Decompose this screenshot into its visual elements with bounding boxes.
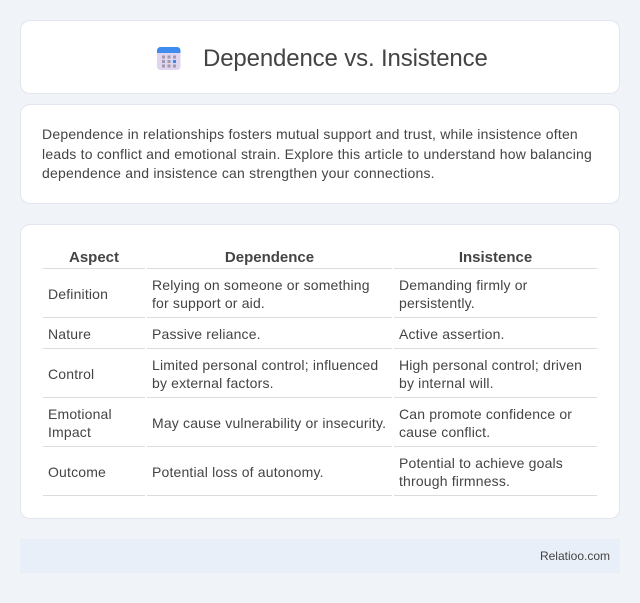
text block: introduction: leads to conflict and emotional strain. Explore this article to understand how balancing — [42, 146, 592, 162]
row: control: Limited personal control; influenced — [152, 357, 378, 373]
row: definition — [43, 277, 597, 318]
row: emotional impact: Can promote confidence or — [399, 406, 572, 422]
row: control: by external factors. — [152, 375, 274, 391]
panel: header — [20, 20, 620, 94]
row: definition: Definition — [48, 286, 108, 302]
row: emotional impact — [43, 406, 597, 447]
title: Dependence vs. Insistence — [203, 45, 488, 72]
footer — [20, 539, 620, 573]
row: outcome: Potential to achieve goals — [399, 455, 563, 471]
comparison table — [43, 249, 597, 496]
icon: calendar — [157, 47, 180, 70]
row: emotional impact: cause conflict. — [399, 424, 490, 440]
row: emotional impact: May cause vulnerability or insecurity. — [152, 415, 386, 431]
row: nature: Nature — [48, 326, 91, 342]
row: definition: persistently. — [399, 295, 475, 311]
text block: introduction — [42, 126, 592, 181]
row: control: by internal will. — [399, 375, 494, 391]
table header row — [43, 249, 597, 269]
row: control: Control — [48, 366, 94, 382]
row: outcome: through firmness. — [399, 473, 510, 489]
table header row: Dependence — [225, 249, 314, 266]
row: control: High personal control; driven — [399, 357, 582, 373]
panel: comparison table — [20, 224, 620, 519]
table header row: Insistence — [459, 249, 532, 266]
row: emotional impact: Impact — [48, 424, 91, 440]
row: definition: for support or aid. — [152, 295, 265, 311]
footer brand text: Relatioo.com — [540, 549, 610, 563]
row: definition: Relying on someone or something — [152, 277, 370, 293]
row: outcome — [43, 455, 597, 496]
row: control — [43, 357, 597, 398]
row: nature: Passive reliance. — [152, 326, 261, 342]
row: nature: Active assertion. — [399, 326, 505, 342]
text block: introduction: Dependence in relationships fosters mutual support and trust, while insistence often — [42, 126, 578, 142]
text block: introduction: dependence and insistence can strengthen your connections. — [42, 165, 435, 181]
row: outcome: Potential loss of autonomy. — [152, 464, 324, 480]
panel: introduction — [20, 104, 620, 204]
row: outcome: Outcome — [48, 464, 106, 480]
table header row: Aspect — [69, 249, 119, 266]
row: emotional impact: Emotional — [48, 406, 112, 422]
row: definition: Demanding firmly or — [399, 277, 528, 293]
row: nature — [43, 326, 597, 349]
